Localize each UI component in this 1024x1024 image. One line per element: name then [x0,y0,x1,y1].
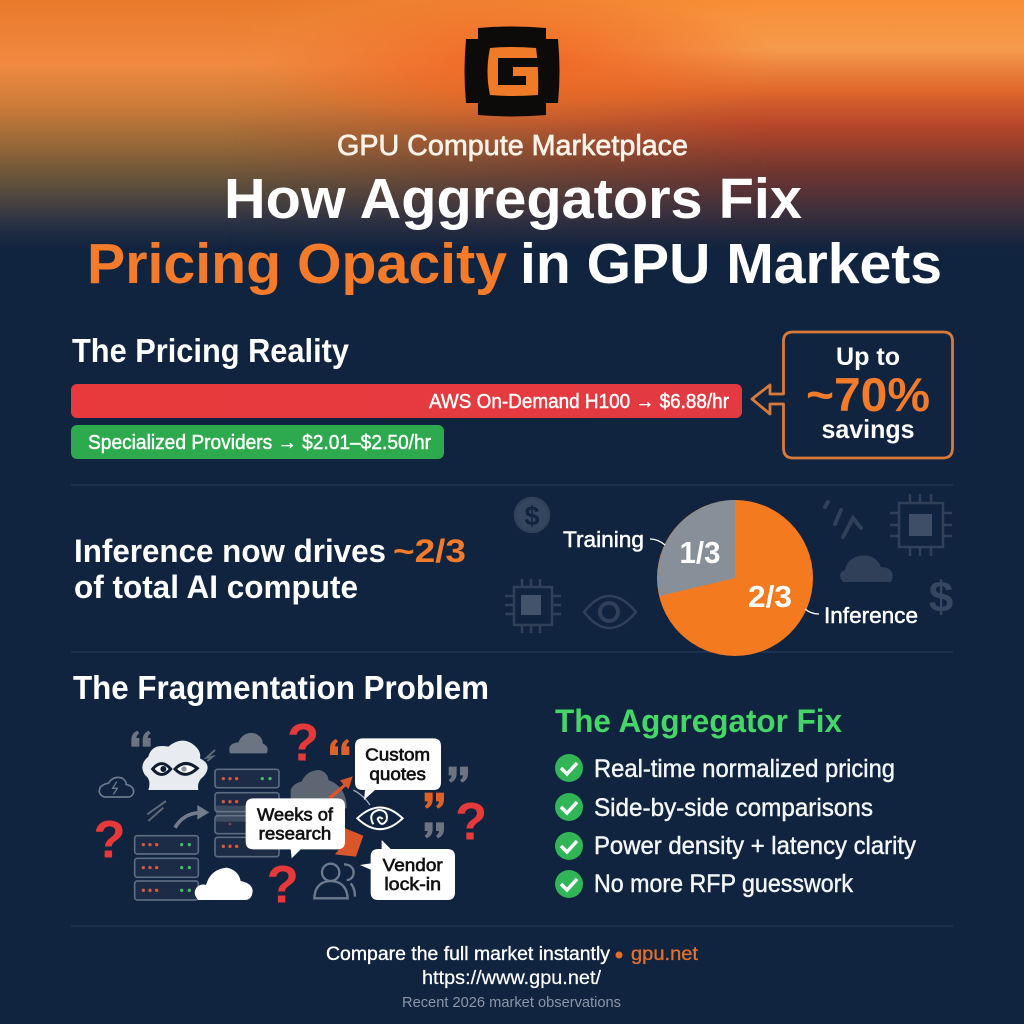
speech bubble: weeks of research: Weeks of [257,804,334,824]
pie chart [657,500,813,656]
background icons: $ [524,501,540,531]
title line 2: Pricing Opacity [87,232,507,296]
bar: AWS on-demand: AWS On-Demand H100 → $6.88/hr [429,391,729,413]
smoke over racks [216,806,278,822]
arrow and callout border [752,332,952,458]
footer [326,943,699,1011]
label: Inference: Inference [824,603,918,628]
speech bubble: weeks of research [246,798,345,858]
eye [353,790,403,829]
text: inference share: of total AI compute [74,569,358,605]
question marks: ? [267,855,299,914]
eyebrow: GPU Compute Marketplace [337,130,688,162]
background [0,0,1024,243]
speech bubble: vendor lock-in [360,840,455,900]
item 2: Side-by-side comparisons [594,794,873,822]
quote marks [131,731,468,838]
bar: AWS on-demand [71,384,742,418]
title line 2 [87,232,942,296]
white cloud [195,868,253,900]
server racks [135,769,279,900]
icon: G logo [464,26,560,116]
background icons: $ [929,573,953,622]
orange arrows [328,776,363,857]
question marks: ? [455,792,487,851]
title line 2: in GPU Markets [520,232,942,296]
title line 1: How Aggregators Fix [224,167,802,231]
speech bubble: custom quotes: quotes [369,764,426,784]
dark cloud [291,770,347,808]
background icons [505,494,953,633]
speech bubble: custom quotes: Custom [365,745,430,765]
label: Training: Training [563,527,644,552]
people [314,864,355,898]
item 3: Power density + latency clarity [594,832,916,860]
curved arrow [175,805,209,828]
heading: The Aggregator Fix: The Aggregator Fix [555,703,842,739]
bar: specialized providers [71,425,444,459]
callout text: ~70% [806,368,930,421]
cloud with eyes [142,741,208,790]
call to action: Compare the full market instantly [326,943,610,965]
text: inference share [74,533,466,605]
call to action: gpu.net [631,943,699,965]
url: https://www.gpu.net/ [422,967,602,989]
outline cloud with bolt [99,777,134,797]
text: inference share: Inference now drives [74,533,386,569]
callout text [806,343,930,444]
speech bubble: vendor lock-in: lock-in [384,874,441,894]
source note: Recent 2026 market observations [402,994,621,1011]
text: inference share: ~2/3 [393,533,466,569]
heading: The Pricing Reality: The Pricing Reality [72,332,350,369]
question marks: ? [93,810,126,869]
server lights [142,777,238,892]
illustration: fragmentation [93,714,487,914]
pie chart: 1/3 [680,535,720,570]
pie chart: 2/3 [748,579,792,614]
speech bubble: weeks of research: research [259,823,331,843]
question marks: ? [287,714,319,773]
speech bubble: custom quotes [355,738,441,800]
item 1: Real-time normalized pricing [594,755,895,783]
callout: savings [752,332,952,458]
heading: The Fragmentation Problem: The Fragmentation Problem [73,669,489,706]
lightning marks [147,750,215,821]
bar: specialized providers: Specialized Providers → $2.01–$2.50/hr [88,432,431,454]
callout text: savings [822,414,914,444]
server status dots [180,777,272,892]
callout text: Up to [836,343,900,371]
item 4: No more RFP guesswork [594,870,853,898]
speech bubble: vendor lock-in: Vendor [383,855,443,875]
list: aggregator benefits [555,754,916,898]
question marks [93,714,487,914]
gray cloud [229,733,268,753]
